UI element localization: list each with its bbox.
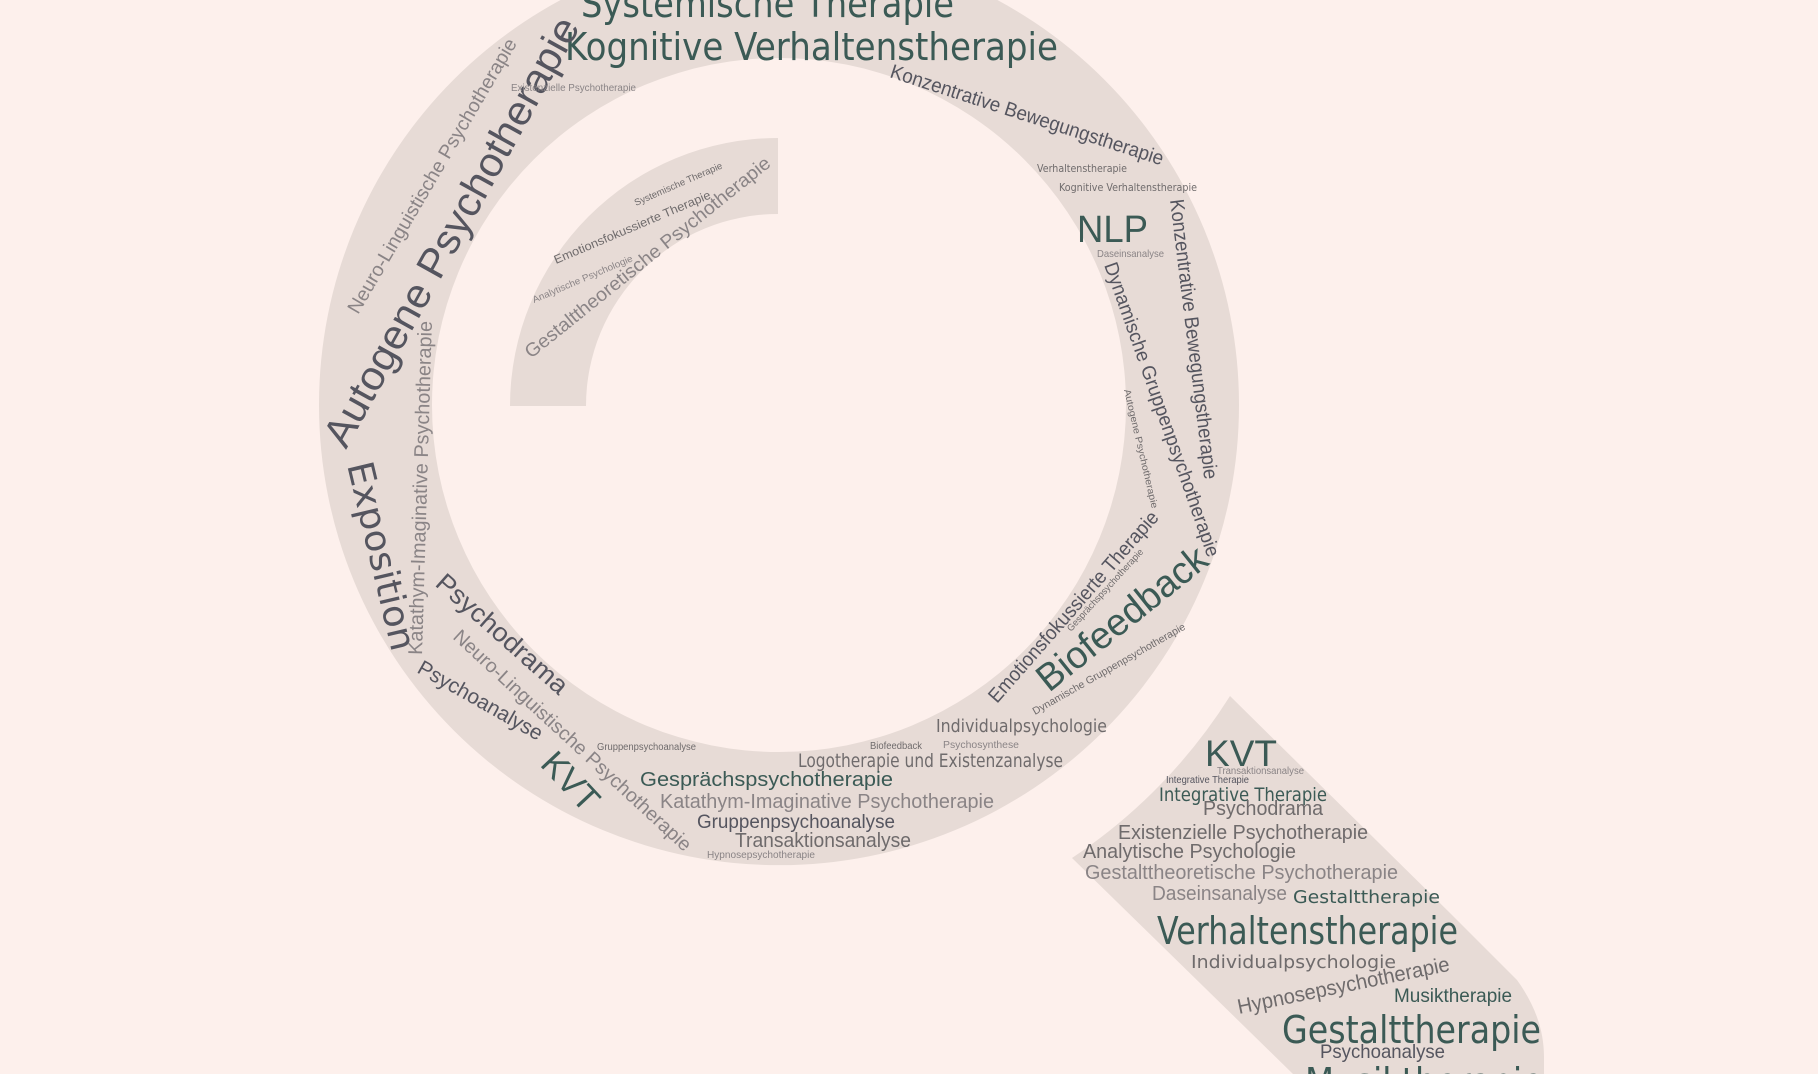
word: Verhaltenstherapie	[1157, 909, 1458, 953]
word: Daseinsanalyse	[1097, 248, 1164, 260]
word: Konzentrative Bewegungstherapie	[887, 61, 1166, 170]
word: Transaktionsanalyse	[1217, 766, 1304, 777]
word: Individualpsychologie	[1191, 952, 1396, 973]
word: Psychoanalyse	[414, 656, 547, 745]
word: Katathym-Imaginative Psychotherapie	[405, 321, 437, 655]
word: Gruppenpsychoanalyse	[597, 742, 696, 753]
word: Dynamische Gruppenpsychotherapie	[1031, 621, 1188, 718]
word: NLP	[1077, 209, 1148, 251]
word: Analytische Psychologie	[531, 253, 635, 306]
panel: glass highlight arc	[510, 138, 778, 406]
arc shape	[510, 138, 778, 406]
word: Psychoanalyse	[1320, 1041, 1445, 1063]
word: Transaktionsanalyse	[735, 830, 911, 852]
panel: magnifier handle	[1072, 696, 1544, 1074]
word: KVT	[1205, 733, 1277, 774]
word: Gruppenpsychoanalyse	[697, 812, 895, 833]
word: Kognitive Verhaltenstherapie	[565, 25, 1058, 69]
word: Emotionsfokussierte Therapie	[984, 507, 1163, 707]
word: Hypnosepsychotherapie	[707, 850, 815, 861]
word: Logotherapie und Existenzanalyse	[798, 750, 1063, 772]
word: Musiktherapie	[1394, 986, 1512, 1007]
word: Gestalttherapie	[1282, 1008, 1541, 1052]
word: Psychosynthese	[943, 740, 1019, 751]
ring shape	[319, 0, 1239, 865]
word: Autogene Psychotherapie	[314, 9, 589, 454]
word: Emotionsfokussierte Therapie	[552, 188, 713, 267]
word: Integrative Therapie	[1166, 775, 1249, 786]
word: Psychodrama	[430, 567, 575, 701]
handle shape	[1072, 696, 1544, 1074]
word: Analytische Psychologie	[1083, 841, 1296, 863]
word: Existenzielle Psychotherapie	[1118, 822, 1368, 844]
word: Gestalttheoretische Psychotherapie	[521, 153, 775, 363]
word: Kognitive Verhaltenstherapie	[1059, 182, 1197, 194]
word: Katathym-Imaginative Psychotherapie	[660, 791, 994, 813]
word: Psychodrama	[1203, 798, 1324, 820]
word: Exposition	[338, 458, 423, 655]
word: Existenzielle Psychotherapie	[511, 83, 636, 94]
word: Daseinsanalyse	[1152, 883, 1287, 905]
word: Gestalttheoretische Psychotherapie	[1085, 862, 1398, 884]
word: KVT	[533, 744, 607, 819]
word: Verhaltenstherapie	[1037, 163, 1127, 175]
word: Systemische Therapie	[633, 161, 724, 209]
word: Autogene Psychotherapie	[1121, 388, 1160, 509]
word: Individualpsychologie	[936, 716, 1107, 737]
word: Integrative Therapie	[1159, 784, 1327, 806]
word: Gesprächspsychotherapie	[1065, 547, 1146, 634]
word: Gesprächspsychotherapie	[640, 769, 893, 791]
word: Biofeedback	[870, 741, 923, 752]
word: Gestalttherapie	[1293, 887, 1440, 908]
word: Neuro-Linguistische Psychotherapie	[449, 626, 696, 856]
word: Dynamische Gruppenpsychotherapie	[1099, 259, 1224, 560]
word: Konzentrative Bewegungstherapie	[1165, 198, 1221, 481]
word: Biofeedback	[1028, 537, 1217, 700]
word: Hypnosepsychotherapie	[1235, 953, 1452, 1019]
word: Neuro-Linguistische Psychotherapie	[343, 35, 522, 318]
panel: lens ring	[314, 0, 1239, 865]
